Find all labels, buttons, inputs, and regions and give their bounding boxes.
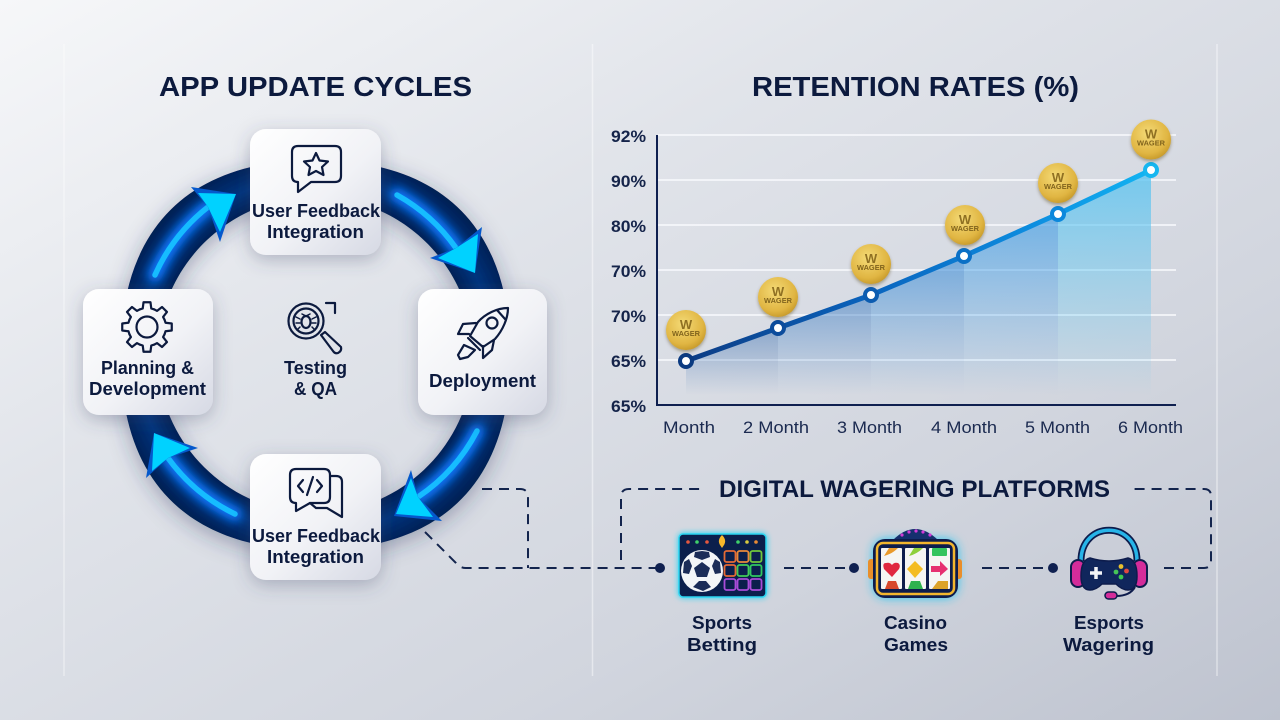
y axis labels: 80% xyxy=(611,217,646,236)
icon: rocket xyxy=(458,308,508,359)
icon: headset controller xyxy=(1071,530,1147,599)
platform: casino games xyxy=(868,529,962,655)
card: planning and development xyxy=(83,289,213,415)
icon: slot machine xyxy=(868,529,962,598)
coin badges: WAGER xyxy=(764,298,792,305)
card: planning and development: Planning & xyxy=(101,358,194,378)
coin badges: W xyxy=(772,284,785,299)
x axis labels xyxy=(663,418,1183,437)
card: user feedback integration bottom: Integration xyxy=(267,547,364,567)
y axis labels: 70% xyxy=(611,307,646,326)
icon: star speech bubble xyxy=(292,146,341,192)
platform: sports betting: Betting xyxy=(687,635,757,655)
platform: casino games: Casino xyxy=(884,613,947,633)
arrow: planning to feedback xyxy=(155,187,236,275)
coin badges: WAGER xyxy=(672,331,700,338)
y axis labels: 65% xyxy=(611,352,646,371)
card: user feedback integration bottom: User Feedback xyxy=(252,526,381,546)
card: user feedback integration top: Integration xyxy=(267,222,364,242)
panel: update cycle diagram xyxy=(83,129,547,580)
coin badges: W xyxy=(959,212,972,227)
x axis labels: 3 Month xyxy=(837,418,902,437)
center: testing and qa xyxy=(284,303,347,399)
card: deployment xyxy=(418,289,547,415)
icon: gear xyxy=(122,302,172,352)
platform: esports wagering xyxy=(1063,530,1154,655)
y axis labels: 70% xyxy=(611,262,646,281)
coin badges: WAGER xyxy=(857,265,885,272)
platform: sports betting: Sports xyxy=(692,613,752,633)
platform: casino games: Games xyxy=(884,635,948,655)
coin badges: W xyxy=(865,251,878,266)
platform: esports wagering: Esports xyxy=(1074,613,1144,633)
ring xyxy=(120,160,510,550)
arrow: feedback to deployment xyxy=(397,195,482,273)
data points xyxy=(680,164,1157,367)
x axis labels: 6 Month xyxy=(1118,418,1183,437)
x axis labels: 2 Month xyxy=(743,418,809,437)
area fill under line xyxy=(686,170,1151,395)
arrow: code review to planning xyxy=(146,433,235,514)
card: planning and development: Development xyxy=(89,379,206,399)
coin badges: W xyxy=(1145,126,1158,142)
title: retention rates: RETENTION RATES (%) xyxy=(752,71,1079,102)
icon: bug magnifier xyxy=(288,303,341,353)
x axis labels: 4 Month xyxy=(931,418,997,437)
dashed connectors xyxy=(425,489,1211,573)
coin badges: WAGER xyxy=(1137,140,1165,148)
y axis labels: 65% xyxy=(611,397,646,416)
y axis labels: 90% xyxy=(611,172,646,191)
card: user feedback integration bottom xyxy=(250,454,381,580)
center: testing and qa: & QA xyxy=(294,379,337,399)
coin badges: WAGER xyxy=(951,226,979,233)
coin badges: W xyxy=(1052,170,1065,185)
card: deployment: Deployment xyxy=(429,371,536,391)
chart: retention line chart xyxy=(611,120,1183,437)
card: user feedback integration top: User Feedback xyxy=(252,201,381,221)
arrow: deployment to code review xyxy=(394,431,477,521)
y axis labels xyxy=(611,127,646,416)
coin badges: WAGER xyxy=(1044,184,1072,191)
title: app update cycles: APP UPDATE CYCLES xyxy=(159,71,472,102)
platform: sports betting xyxy=(678,533,767,655)
coin badges xyxy=(666,120,1171,350)
icon: code speech bubbles xyxy=(290,469,342,517)
heading: digital wagering platforms: DIGITAL WAGERING PLATFORMS xyxy=(719,476,1110,503)
x axis labels: 5 Month xyxy=(1025,418,1090,437)
platform: esports wagering: Wagering xyxy=(1063,635,1154,655)
card: user feedback integration top xyxy=(250,129,381,255)
coin badges: W xyxy=(680,317,693,332)
icon: sports betting panel xyxy=(678,533,767,598)
trend line xyxy=(686,170,1151,361)
x axis labels: Month xyxy=(663,418,715,437)
center: testing and qa: Testing xyxy=(284,358,347,378)
y axis labels: 92% xyxy=(611,127,646,146)
